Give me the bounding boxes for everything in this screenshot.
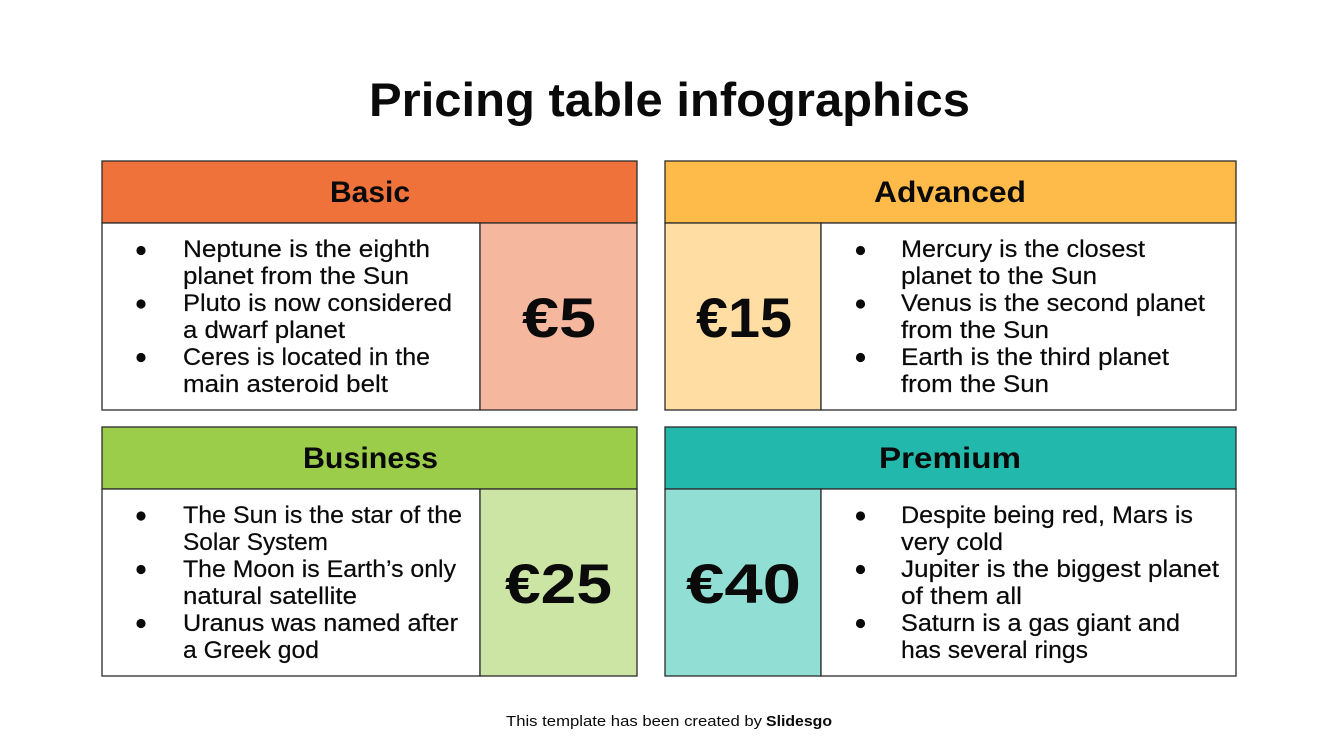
feature list: business: Solar System	[183, 529, 328, 556]
feature list: business: The Sun is the star of the	[183, 502, 462, 529]
feature list: premium: of them all	[901, 583, 1022, 610]
price: advanced: €15	[696, 286, 792, 349]
feature list: business: Uranus was named after	[183, 610, 458, 637]
feature list: advanced: Venus is the second planet	[901, 290, 1205, 317]
feature list: basic	[102, 223, 480, 410]
feature list: business: The Moon is Earth’s only	[183, 556, 456, 583]
panel: business	[102, 427, 637, 676]
panel: basic	[102, 161, 637, 410]
feature list: advanced: Mercury is the closest	[901, 236, 1145, 263]
feature list: business: natural satellite	[183, 583, 357, 610]
header: basic: Basic	[330, 176, 410, 209]
feature list: premium: has several rings	[901, 637, 1088, 664]
feature list: basic: a dwarf planet	[183, 317, 345, 344]
feature list: advanced: Earth is the third planet	[901, 344, 1169, 371]
feature list: advanced: from the Sun	[901, 371, 1049, 398]
header: basic	[102, 161, 637, 223]
price: advanced	[665, 223, 821, 410]
price: basic	[480, 223, 637, 410]
price: premium: €40	[686, 552, 801, 615]
price: premium	[665, 489, 821, 676]
title: Pricing table infographics	[369, 73, 970, 126]
feature list: premium: very cold	[901, 529, 1003, 556]
feature list: basic: main asteroid belt	[183, 371, 388, 398]
price: basic: €5	[522, 286, 596, 349]
feature list: premium: Saturn is a gas giant and	[901, 610, 1180, 637]
header: business: Business	[303, 442, 438, 475]
feature list: premium: Despite being red, Mars is	[901, 502, 1193, 529]
feature list: basic: Neptune is the eighth	[183, 236, 430, 263]
feature list: premium: Jupiter is the biggest planet	[901, 556, 1219, 583]
header: premium	[665, 427, 1236, 489]
header: business	[102, 427, 637, 489]
panel: advanced	[665, 161, 1236, 410]
feature list: basic: planet from the Sun	[183, 263, 409, 290]
header: advanced: Advanced	[874, 176, 1026, 209]
feature list: premium	[821, 489, 1236, 676]
footer credit: This template has been created by	[506, 713, 763, 730]
feature list: basic: Ceres is located in the	[183, 344, 430, 371]
header: advanced	[665, 161, 1236, 223]
feature list: advanced: from the Sun	[901, 317, 1049, 344]
feature list: business: a Greek god	[183, 637, 319, 664]
header: premium: Premium	[879, 442, 1021, 475]
feature list: advanced: planet to the Sun	[901, 263, 1097, 290]
feature list: business	[102, 489, 480, 676]
price: business: €25	[505, 552, 612, 615]
price: business	[480, 489, 637, 676]
feature list: advanced	[821, 223, 1236, 410]
feature list: basic: Pluto is now considered	[183, 290, 452, 317]
footer credit: Slidesgo	[766, 713, 832, 730]
panel: premium	[665, 427, 1236, 676]
